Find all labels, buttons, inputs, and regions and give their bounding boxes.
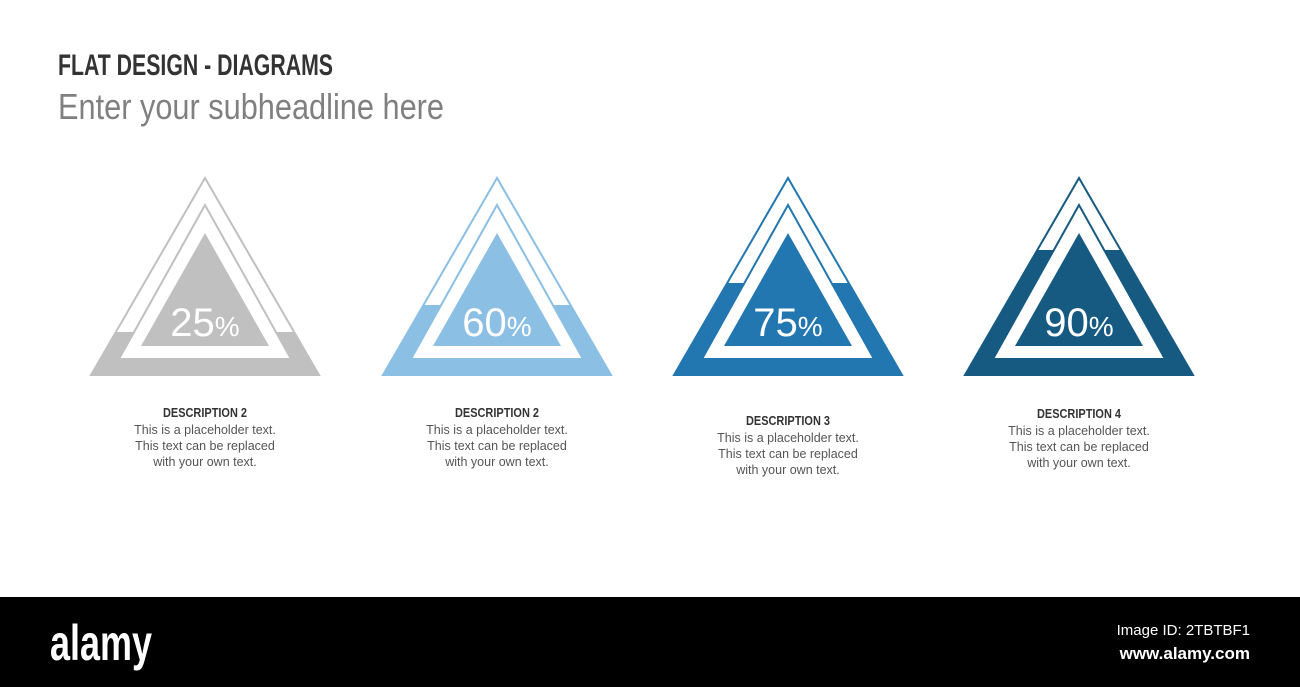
description 1: DESCRIPTION 2 [163, 406, 247, 420]
website: www.alamy.com [1119, 644, 1250, 663]
description 3: This text can be replaced [718, 447, 858, 461]
triangle 2: 60% [370, 178, 620, 380]
description 2 [426, 406, 568, 469]
description 4: with your own text. [1026, 456, 1131, 470]
description 3: DESCRIPTION 3 [746, 414, 830, 428]
description 1: with your own text. [152, 455, 257, 469]
footer bar [0, 597, 1300, 687]
description 4 [1008, 407, 1150, 470]
triangle 2: 60%: 60% [462, 301, 532, 345]
description 4: This text can be replaced [1009, 440, 1149, 454]
description 3: with your own text. [735, 463, 840, 477]
description 3 [717, 414, 859, 477]
description 1: This is a placeholder text. [134, 423, 276, 437]
subheadline: Enter your subheadline here [58, 86, 444, 127]
description 2: DESCRIPTION 2 [455, 406, 539, 420]
description 3: This is a placeholder text. [717, 431, 859, 445]
description 2: This is a placeholder text. [426, 423, 568, 437]
triangle 1: 25% [80, 178, 330, 382]
description 2: with your own text. [444, 455, 549, 469]
logo: alamy: alamy [50, 615, 152, 671]
triangle 3: 75%: 75% [753, 301, 823, 345]
triangle 1: 25%: 25% [170, 301, 240, 345]
description 4: DESCRIPTION 4 [1037, 407, 1121, 421]
triangle 4: 90%: 90% [1044, 301, 1114, 345]
description 2: This text can be replaced [427, 439, 567, 453]
image id: Image ID: 2TBTBF1 [1117, 622, 1250, 639]
triangle 4: 90% [950, 178, 1200, 380]
description 1 [134, 406, 276, 469]
title: FLAT DESIGN - DIAGRAMS [58, 49, 333, 82]
description 1: This text can be replaced [135, 439, 275, 453]
description 4: This is a placeholder text. [1008, 424, 1150, 438]
triangle 3: 75% [660, 178, 910, 378]
